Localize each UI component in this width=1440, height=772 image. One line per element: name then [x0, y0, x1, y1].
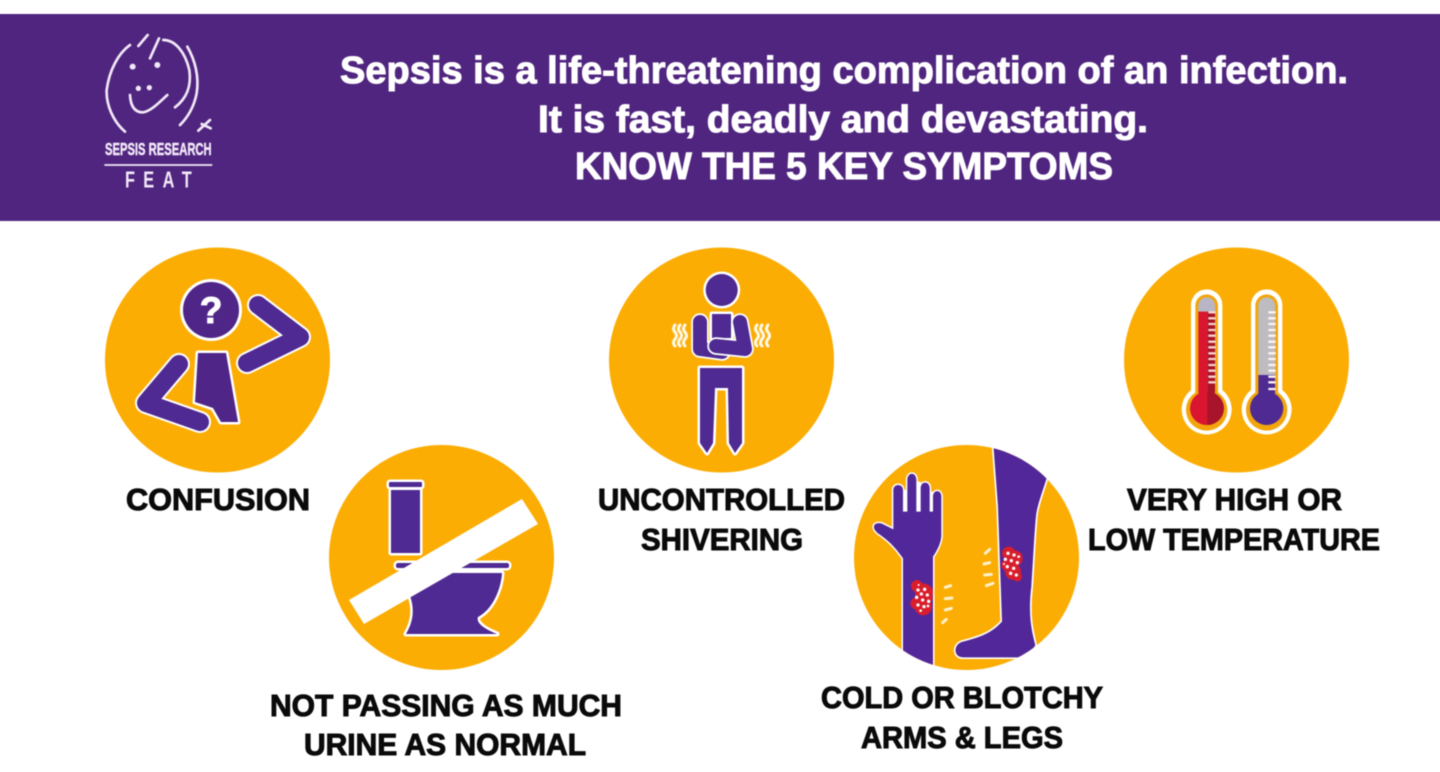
label: not passing urine: NOT PASSING AS MUCH — [270, 688, 622, 723]
icon: confused figure: ? — [200, 290, 222, 331]
label: cold or blotchy limbs — [821, 680, 1103, 755]
label: shivering: UNCONTROLLED — [598, 482, 845, 517]
label: shivering: SHIVERING — [641, 522, 803, 557]
icon: cold thermometer — [1242, 289, 1292, 434]
headline: KNOW THE 5 KEY SYMPTOMS — [575, 146, 1113, 188]
icon: confused figure — [146, 279, 300, 422]
symptom: confusion — [105, 248, 330, 517]
icon: shivering figure — [674, 272, 770, 453]
symptom: not passing urine — [270, 445, 622, 762]
headline: It is fast, deadly and devastating. — [538, 99, 1148, 141]
icon: arm and leg with rash — [874, 440, 1048, 673]
label: temperature: VERY HIGH OR — [1127, 482, 1342, 517]
symptom: temperature — [1088, 248, 1380, 557]
headline: Sepsis is a life-threatening complication of an infection. — [340, 50, 1348, 92]
symptom: shivering — [598, 248, 845, 557]
label: temperature: LOW TEMPERATURE — [1088, 522, 1380, 557]
headline — [340, 50, 1348, 188]
label: cold or blotchy limbs: COLD OR BLOTCHY — [821, 680, 1103, 715]
icon: thermometers — [1182, 289, 1292, 434]
label: not passing urine — [270, 688, 622, 762]
symptom: cold or blotchy limbs — [821, 440, 1103, 755]
icon: crossed-out toilet — [349, 482, 538, 634]
logo: Sepsis Research FEAT — [105, 35, 212, 193]
label: confusion: CONFUSION — [126, 482, 310, 517]
label: shivering — [598, 482, 845, 557]
logo: Sepsis Research FEAT: FEAT — [125, 168, 192, 193]
icon: hot thermometer — [1182, 289, 1232, 434]
label: not passing urine: URINE AS NORMAL — [304, 727, 586, 762]
label: temperature — [1088, 482, 1380, 557]
header band — [0, 14, 1440, 221]
label: cold or blotchy limbs: ARMS & LEGS — [861, 720, 1063, 755]
logo: Sepsis Research FEAT: SEPSIS RESEARCH — [105, 139, 212, 159]
